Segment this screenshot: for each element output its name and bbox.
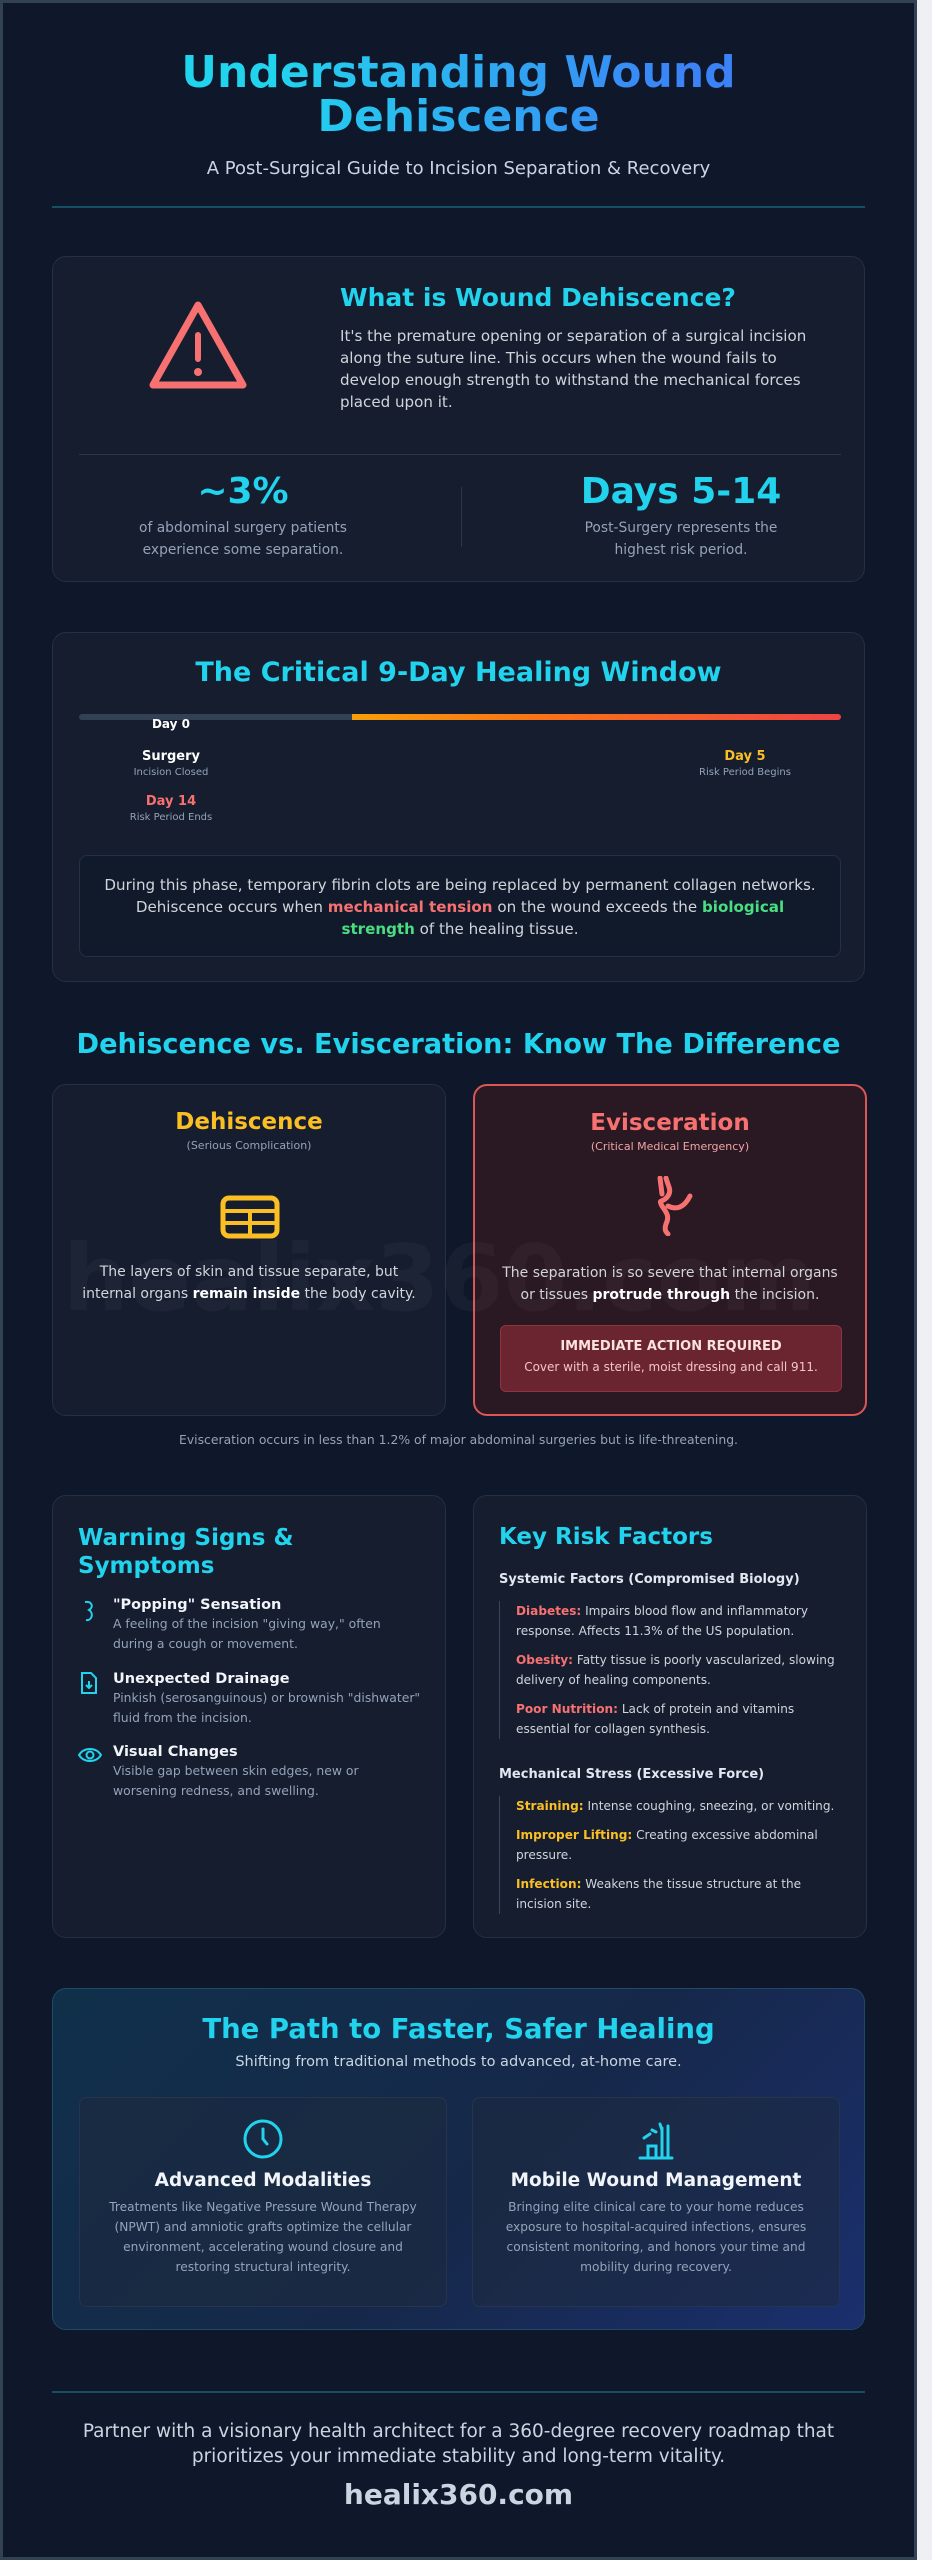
day 5 label [699, 749, 791, 778]
group: systemic: Diabetes: Impairs blood flow and inflammatory [516, 1604, 808, 1618]
footer brand: healix360.com [344, 2478, 573, 2511]
panel: evisceration [473, 1084, 867, 1416]
day labels: Day 0 [152, 717, 190, 731]
panel: what is dehiscence [52, 256, 865, 582]
icon: layers [220, 1196, 280, 1238]
heading: The Critical 9-Day Healing Window [195, 657, 722, 688]
explanation box: During this phase, temporary fibrin clots are being replaced by permanent collagen networks. [104, 876, 816, 894]
watermark: healix360.com [63, 1225, 816, 1332]
item: visual: Visible gap between skin edges, new or [113, 1763, 359, 1778]
title [3, 51, 914, 139]
text: The layers of skin and tissue separate, but [100, 1264, 398, 1280]
group: mechanical [499, 1767, 834, 1914]
panel: evisceration: (Critical Medical Emergency) [591, 1140, 749, 1153]
stat: days 5-14: Days 5-14 [581, 471, 781, 512]
day 5 label: Day 5 [724, 749, 766, 764]
item: popping [84, 1597, 381, 1651]
body text: placed upon it. [340, 393, 453, 411]
day 5 label: Risk Period Begins [699, 767, 791, 778]
sub-card: advanced modalities [79, 2097, 447, 2307]
callout: immediate action [500, 1325, 842, 1392]
sub-card: mobile wound management: Mobile Wound Management [511, 2170, 801, 2191]
sub-card: mobile wound management [472, 2097, 840, 2307]
item: visual [78, 1744, 359, 1798]
sub-card: mobile wound management: mobility during recovery. [580, 2260, 732, 2274]
group: systemic: Obesity: Fatty tissue is poorly vascularized, slowing [516, 1653, 835, 1667]
stat: 3%: ~3% [197, 471, 289, 512]
sub-card: advanced modalities: Treatments like Negative Pressure Wound Therapy [109, 2200, 417, 2214]
day labels: Day 14 [146, 794, 196, 809]
group: systemic [499, 1572, 835, 1739]
stat: days 5-14 [581, 471, 781, 558]
day labels: Surgery [142, 749, 200, 764]
text: internal organs remain inside the body cavity. [82, 1286, 416, 1302]
group: mechanical: Straining: Intense coughing, sneezing, or vomiting. [516, 1799, 834, 1813]
text [82, 1264, 416, 1302]
heading: Warning Signs & [78, 1525, 294, 1551]
item: popping: A feeling of the incision "giving way," often [113, 1616, 381, 1631]
title: Dehiscence [317, 91, 600, 142]
sub-card: mobile wound management: consistent monitoring, and honors your time and [507, 2240, 805, 2254]
text: The separation is so severe that internal organs [502, 1265, 838, 1281]
sub-card: mobile wound management: exposure to hospital-acquired infections, ensures [506, 2220, 806, 2234]
body text: along the suture line. This occurs when the wound fails to [340, 349, 777, 367]
text: or tissues protrude through the incision. [521, 1287, 819, 1303]
panel: risk factors [473, 1495, 867, 1938]
group: systemic: response. Affects 11.3% of the US population. [516, 1624, 794, 1638]
item: drainage: Pinkish (serosanguinous) or brownish "dishwater" [113, 1690, 420, 1705]
stat: 3%: of abdominal surgery patients [139, 520, 347, 536]
callout: immediate action: Cover with a sterile, moist dressing and call 911. [524, 1360, 818, 1374]
heading [78, 1525, 294, 1579]
item: drainage: Unexpected Drainage [113, 1671, 290, 1687]
panel: healing window [52, 632, 865, 982]
icon: warning triangle [150, 302, 246, 388]
sub-card: advanced modalities: Advanced Modalities [155, 2170, 371, 2191]
sub-card: advanced modalities: (NPWT) and amniotic grafts optimize the cellular [115, 2220, 411, 2234]
subtitle: A Post-Surgical Guide to Incision Separation & Recovery [207, 158, 710, 179]
item: visual: worsening redness, and swelling. [113, 1783, 319, 1798]
day labels [130, 717, 212, 823]
item: drainage: fluid from the incision. [113, 1710, 252, 1725]
item: drainage [81, 1671, 420, 1725]
stat: days 5-14: highest risk period. [615, 542, 747, 558]
heading: The Path to Faster, Safer Healing [202, 2013, 715, 2045]
panel: warning signs [52, 1495, 446, 1938]
footer text [83, 2421, 834, 2467]
stat: days 5-14: Post-Surgery represents the [585, 520, 777, 536]
panel: dehiscence: Dehiscence [175, 1109, 323, 1135]
heading: Symptoms [78, 1553, 214, 1579]
callout: immediate action: IMMEDIATE ACTION REQUIRED [560, 1339, 782, 1354]
panel: evisceration: Evisceration [590, 1110, 750, 1136]
day labels: Risk Period Ends [130, 812, 212, 823]
group: mechanical: pressure. [516, 1848, 572, 1862]
body text [340, 327, 806, 411]
body text: It's the premature opening or separation of a surgical incision [340, 327, 806, 345]
group: systemic: essential for collagen synthesis. [516, 1722, 710, 1736]
group: systemic: delivery of healing components. [516, 1673, 711, 1687]
footer text: prioritizes your immediate stability and long-term vitality. [192, 2446, 725, 2467]
heading: What is Wound Dehiscence? [340, 283, 736, 312]
group: mechanical: Mechanical Stress (Excessive Force) [499, 1767, 764, 1782]
icon: intestine [658, 1176, 692, 1236]
group: mechanical: incision site. [516, 1897, 591, 1911]
group: systemic: Poor Nutrition: Lack of protein and vitamins [516, 1702, 794, 1716]
group: mechanical: Infection: Weakens the tissue structure at the [516, 1877, 801, 1891]
body text: develop enough strength to withstand the mechanical forces [340, 371, 801, 389]
sub-card: advanced modalities: restoring structural integrity. [175, 2260, 350, 2274]
icon: clock [244, 2120, 282, 2158]
stat: 3%: experience some separation. [143, 542, 343, 558]
footer text: Partner with a visionary health architect for a 360-degree recovery roadmap that [83, 2421, 834, 2442]
item: popping: "Popping" Sensation [113, 1597, 281, 1613]
footnote: Evisceration occurs in less than 1.2% of major abdominal surgeries but is life-threatening. [179, 1432, 738, 1447]
item: popping: during a cough or movement. [113, 1636, 298, 1651]
explanation box: strength of the healing tissue. [341, 920, 579, 938]
group: mechanical: Improper Lifting: Creating excessive abdominal [516, 1828, 818, 1842]
heading: Key Risk Factors [499, 1524, 713, 1550]
title: Understanding Wound [181, 47, 736, 98]
sub-card: mobile wound management: Bringing elite clinical care to your home reduces [508, 2200, 804, 2214]
explanation box: Dehiscence occurs when mechanical tension on the wound exceeds the biological [136, 898, 784, 916]
panel: path to healing [52, 1988, 865, 2330]
explanation box [79, 855, 841, 957]
day labels: Incision Closed [134, 767, 208, 778]
text [502, 1265, 838, 1303]
group: systemic: Systemic Factors (Compromised Biology) [499, 1572, 800, 1587]
icon: home care [638, 2122, 674, 2160]
section heading: vs: Dehiscence vs. Evisceration: Know The Difference [77, 1029, 840, 1060]
stat: 3% [139, 471, 347, 558]
subtitle: Shifting from traditional methods to advanced, at-home care. [235, 2054, 682, 2070]
timeline bar [79, 714, 841, 720]
panel: dehiscence [52, 1084, 446, 1416]
item: visual: Visual Changes [113, 1744, 238, 1760]
sub-card: advanced modalities: environment, accelerating wound closure and [123, 2240, 403, 2254]
panel: dehiscence: (Serious Complication) [187, 1139, 311, 1152]
